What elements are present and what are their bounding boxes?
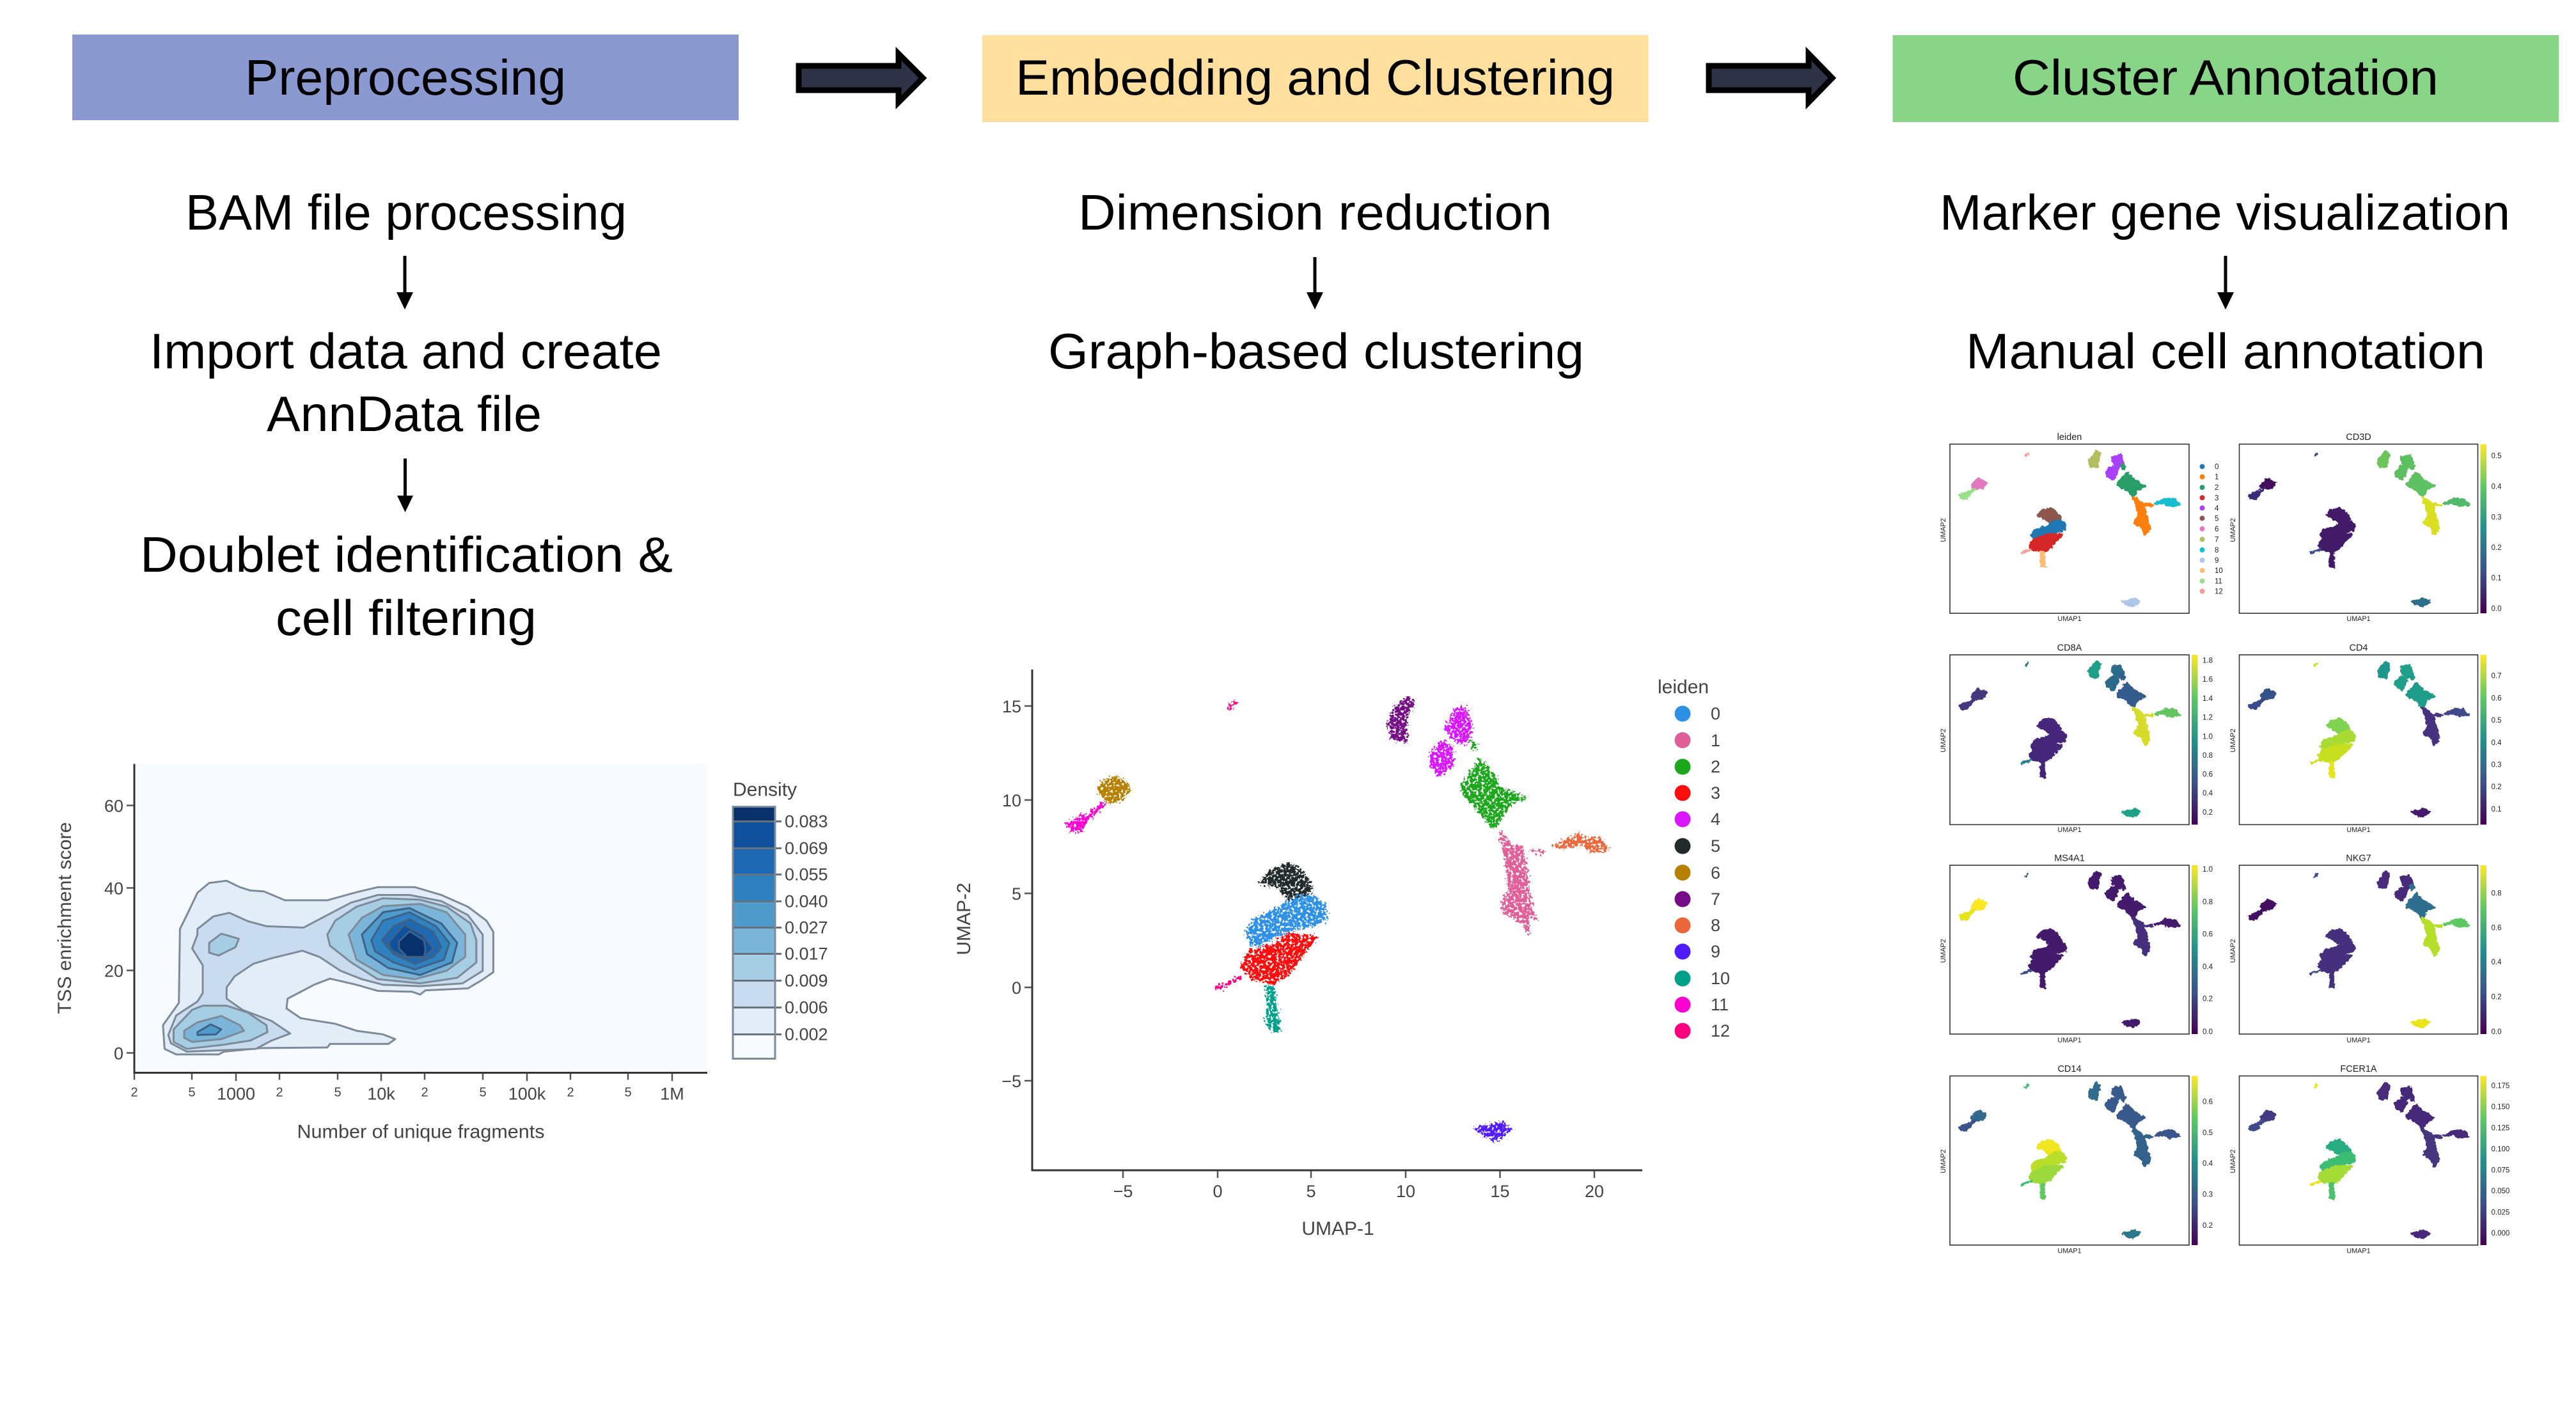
panel: NKG7 UMAP: 0.4 xyxy=(2492,959,2502,966)
x axis ticks and labels xyxy=(130,1073,684,1104)
text: Doublet identification and cell filtering: Doublet identification & xyxy=(140,526,673,583)
panel: FCER1A UMAP: 0.150 xyxy=(2492,1103,2509,1111)
x axis ticks and labels: −5 xyxy=(1113,1182,1133,1201)
panel: FCER1A UMAP: 0.100 xyxy=(2492,1145,2509,1153)
panel: CD3D UMAP: CD3D xyxy=(2346,432,2371,443)
column: preprocessing xyxy=(72,35,739,646)
text: Doublet identification and cell filtering xyxy=(140,526,673,646)
panel: leiden UMAP: 9 xyxy=(2215,557,2219,565)
panel: FCER1A UMAP: 0.075 xyxy=(2492,1166,2509,1174)
panel: CD8A UMAP: 1.2 xyxy=(2203,714,2213,721)
y axis ticks and labels: 20 xyxy=(104,962,123,981)
panel: CD4 UMAP: 0.5 xyxy=(2492,717,2502,725)
panel: leiden UMAP: 12 xyxy=(2215,588,2223,596)
x axis title: Number of unique fragments xyxy=(297,1122,545,1142)
panel: CD8A UMAP: CD8A xyxy=(2057,643,2082,654)
x axis ticks and labels: 20 xyxy=(1585,1182,1604,1201)
density legend: Density xyxy=(733,779,797,801)
panel: CD4 UMAP: 0.4 xyxy=(2492,739,2502,747)
panel: NKG7 UMAP: 0.2 xyxy=(2492,994,2502,1001)
x axis ticks and labels: 2 xyxy=(421,1086,428,1100)
x axis title: UMAP-1 xyxy=(1301,1218,1374,1239)
panel: CD4 UMAP: UMAP2 xyxy=(2229,728,2237,753)
leiden legend: 9 xyxy=(1711,942,1720,961)
panel: CD8A UMAP: 1.4 xyxy=(2203,695,2213,703)
panel: NKG7 UMAP: 0.6 xyxy=(2492,924,2502,932)
panel: leiden UMAP: 8 xyxy=(2215,547,2219,554)
panel: CD14 UMAP: 0.5 xyxy=(2203,1129,2213,1137)
panel: CD4 UMAP: 0.1 xyxy=(2492,806,2502,813)
leiden legend: 1 xyxy=(1711,731,1720,750)
leiden legend: 0 xyxy=(1711,704,1720,723)
leiden legend xyxy=(1658,677,1730,1040)
arrow: down to clustering xyxy=(1307,257,1323,310)
panel: NKG7 UMAP: UMAP2 xyxy=(2229,939,2237,963)
panel: MS4A1 UMAP: 0.4 xyxy=(2203,963,2213,971)
panel: CD14 UMAP: 0.2 xyxy=(2203,1222,2213,1230)
panel: MS4A1 UMAP: MS4A1 xyxy=(2054,853,2085,863)
panel: FCER1A UMAP: UMAP1 xyxy=(2346,1247,2371,1255)
y axis ticks and labels xyxy=(104,797,134,1063)
panel: NKG7 UMAP: UMAP1 xyxy=(2346,1037,2371,1044)
panel: CD14 UMAP: CD14 xyxy=(2057,1064,2082,1074)
panel: FCER1A UMAP xyxy=(2229,1064,2509,1255)
panel: FCER1A UMAP: 0.175 xyxy=(2492,1082,2509,1090)
density legend: 0.027 xyxy=(785,918,828,937)
x axis ticks and labels: 2 xyxy=(567,1086,574,1100)
y axis ticks and labels: 15 xyxy=(1002,697,1021,716)
density legend xyxy=(733,779,828,1059)
arrow: down to import xyxy=(397,256,413,310)
panel: NKG7 UMAP: 0.8 xyxy=(2492,890,2502,898)
text: Import data and create AnnData file: Import data and create xyxy=(150,323,662,379)
y axis title: TSS enrichment score xyxy=(54,822,75,1014)
x axis ticks and labels: 1M xyxy=(660,1085,684,1104)
panel: NKG7 UMAP: NKG7 xyxy=(2346,853,2371,863)
panel: CD8A UMAP: UMAP2 xyxy=(1940,728,1947,753)
chart: TSS enrichment density contour xyxy=(54,764,828,1142)
chart: main UMAP scatter coloured by leiden xyxy=(954,670,1730,1239)
panel: FCER1A UMAP: FCER1A xyxy=(2340,1064,2377,1074)
density legend: 0.009 xyxy=(785,971,828,990)
axes xyxy=(134,764,707,1073)
density legend: 0.040 xyxy=(785,891,828,911)
panel: CD3D UMAP xyxy=(2229,432,2502,623)
text: Marker gene visualization: Marker gene visualization xyxy=(1940,184,2510,240)
panel: CD3D UMAP: 0.4 xyxy=(2492,483,2502,491)
panel: CD8A UMAP: 0.8 xyxy=(2203,752,2213,760)
panel: leiden UMAP: 7 xyxy=(2215,536,2219,544)
heading: Cluster Annotation xyxy=(1893,35,2559,122)
panel: CD8A UMAP: 0.2 xyxy=(2203,809,2213,817)
x axis ticks and labels xyxy=(1113,1171,1604,1201)
panel: leiden UMAP: 10 xyxy=(2215,567,2223,575)
arrow: down to manual annotation xyxy=(2217,256,2234,310)
x axis ticks and labels: 10 xyxy=(1396,1182,1415,1201)
panel: CD4 UMAP: 0.3 xyxy=(2492,761,2502,769)
panel: CD4 UMAP xyxy=(2229,643,2502,834)
panel: CD4 UMAP: CD4 xyxy=(2349,643,2368,654)
panel: FCER1A UMAP: 0.050 xyxy=(2492,1188,2509,1195)
text: Manual cell annotation: Manual cell annotation xyxy=(1966,323,2485,379)
axes xyxy=(1032,670,1642,1170)
panel: CD4 UMAP: 0.6 xyxy=(2492,694,2502,702)
density legend: 0.002 xyxy=(785,1024,828,1044)
panel: MS4A1 UMAP: 0.8 xyxy=(2203,898,2213,906)
text: Graph-based clustering: Graph-based clustering xyxy=(1048,323,1584,379)
panel: FCER1A UMAP: 0.000 xyxy=(2492,1230,2509,1237)
density legend: 0.069 xyxy=(785,839,828,858)
panel: MS4A1 UMAP: 0.0 xyxy=(2203,1028,2213,1036)
panel: MS4A1 UMAP: UMAP1 xyxy=(2057,1037,2082,1044)
panel: FCER1A UMAP: 0.025 xyxy=(2492,1209,2509,1217)
density contours xyxy=(163,881,493,1055)
panel: leiden UMAP: 6 xyxy=(2215,526,2219,533)
leiden legend: 10 xyxy=(1711,969,1730,988)
scatter clusters xyxy=(1066,697,1608,1141)
panel: leiden UMAP: 3 xyxy=(2215,494,2219,502)
plot background xyxy=(134,764,707,1073)
arrow: preprocessing to embedding xyxy=(799,54,923,102)
panel: CD3D UMAP: 0.1 xyxy=(2492,574,2502,582)
y axis ticks and labels: 5 xyxy=(1012,884,1021,904)
leiden legend: 5 xyxy=(1711,836,1720,856)
panel: MS4A1 UMAP: 0.2 xyxy=(2203,996,2213,1003)
x axis ticks and labels: 5 xyxy=(188,1086,196,1100)
panel: CD8A UMAP: 1.0 xyxy=(2203,733,2213,741)
text: Import data and create AnnData file: AnnData file xyxy=(267,386,542,442)
y axis ticks and labels: 0 xyxy=(1012,978,1021,998)
text: BAM file processing: BAM file processing xyxy=(185,184,627,240)
panel: CD8A UMAP xyxy=(1940,643,2213,834)
text: Doublet identification and cell filtering: cell filtering xyxy=(276,590,537,646)
x axis ticks and labels: 1000 xyxy=(217,1085,255,1104)
panel: NKG7 UMAP xyxy=(2229,853,2502,1044)
panel: leiden UMAP xyxy=(1940,432,2223,623)
leiden legend: 12 xyxy=(1711,1021,1730,1040)
panel: CD4 UMAP: UMAP1 xyxy=(2346,826,2371,834)
panel: CD4 UMAP: 0.2 xyxy=(2492,783,2502,791)
heading: Embedding and Clustering xyxy=(982,35,1649,122)
column: embedding and clustering xyxy=(982,35,1649,379)
panel: leiden UMAP: 11 xyxy=(2215,578,2222,586)
panel: CD14 UMAP: 0.6 xyxy=(2203,1099,2213,1106)
panel: CD3D UMAP: 0.5 xyxy=(2492,453,2502,460)
panel: NKG7 UMAP: 0.0 xyxy=(2492,1028,2502,1036)
panel: CD14 UMAP: UMAP2 xyxy=(1940,1149,1947,1173)
leiden legend: 4 xyxy=(1711,810,1720,829)
panel: FCER1A UMAP: 0.125 xyxy=(2492,1124,2509,1132)
heading: Preprocessing xyxy=(72,35,739,120)
leiden legend: 3 xyxy=(1711,783,1720,803)
y axis ticks and labels: 10 xyxy=(1002,791,1021,810)
text: Dimension reduction: Dimension reduction xyxy=(1078,184,1552,240)
x axis ticks and labels: 100k xyxy=(508,1085,546,1104)
panel: CD3D UMAP: 0.0 xyxy=(2492,606,2502,613)
panel: MS4A1 UMAP: UMAP2 xyxy=(1940,939,1947,963)
x axis ticks and labels: 0 xyxy=(1213,1182,1223,1201)
panel: CD3D UMAP: UMAP2 xyxy=(2229,518,2237,542)
arrow: down to doublet xyxy=(397,459,413,512)
panel: MS4A1 UMAP: 0.6 xyxy=(2203,931,2213,939)
panel: leiden UMAP: 0 xyxy=(2215,464,2219,471)
panel: FCER1A UMAP: UMAP2 xyxy=(2229,1149,2237,1173)
text: Import data and create AnnData file xyxy=(150,323,662,442)
y axis ticks and labels: 60 xyxy=(104,797,123,816)
y axis ticks and labels: 0 xyxy=(114,1044,123,1063)
x axis ticks and labels: 5 xyxy=(334,1086,342,1100)
panel: leiden UMAP: leiden xyxy=(2057,432,2082,443)
panel: MS4A1 UMAP: 1.0 xyxy=(2203,866,2213,874)
panel: CD8A UMAP: 1.6 xyxy=(2203,676,2213,684)
density legend: 0.055 xyxy=(785,865,828,884)
panel: CD3D UMAP: UMAP1 xyxy=(2346,615,2371,623)
panel: leiden UMAP: 4 xyxy=(2215,505,2219,512)
panel: CD14 UMAP xyxy=(1940,1064,2213,1255)
panel: MS4A1 UMAP xyxy=(1940,853,2213,1044)
panel: CD3D UMAP: 0.2 xyxy=(2492,544,2502,552)
x axis ticks and labels: 2 xyxy=(130,1086,138,1100)
x axis ticks and labels: 5 xyxy=(624,1086,632,1100)
leiden legend: 6 xyxy=(1711,863,1720,882)
y axis ticks and labels xyxy=(1001,697,1032,1091)
panel: CD14 UMAP: UMAP1 xyxy=(2057,1247,2082,1255)
panel: CD8A UMAP: 0.6 xyxy=(2203,771,2213,778)
y axis title: UMAP-2 xyxy=(954,882,975,955)
column: cluster annotation xyxy=(1893,35,2559,379)
leiden legend: leiden xyxy=(1658,677,1709,698)
panel: leiden UMAP: UMAP2 xyxy=(1940,518,1947,542)
heading: Embedding and Clustering: Embedding and Clustering xyxy=(1016,49,1615,106)
panel: CD14 UMAP: 0.4 xyxy=(2203,1160,2213,1168)
heading: Cluster Annotation: Cluster Annotation xyxy=(2013,49,2439,106)
panel: CD8A UMAP: 0.4 xyxy=(2203,790,2213,797)
leiden legend: 2 xyxy=(1711,757,1720,776)
x axis ticks and labels: 5 xyxy=(479,1086,487,1100)
y axis ticks and labels: 40 xyxy=(104,879,123,898)
panel: leiden UMAP: 2 xyxy=(2215,484,2219,492)
panel: leiden UMAP: 1 xyxy=(2215,474,2219,482)
x axis ticks and labels: 5 xyxy=(1306,1182,1316,1201)
density legend: 0.006 xyxy=(785,998,828,1017)
y axis ticks and labels: −5 xyxy=(1001,1072,1021,1091)
density legend: 0.083 xyxy=(785,812,828,831)
x axis ticks and labels: 15 xyxy=(1490,1182,1510,1201)
panel: leiden UMAP: 5 xyxy=(2215,515,2219,522)
leiden legend: 7 xyxy=(1711,890,1720,909)
heading: Preprocessing: Preprocessing xyxy=(245,49,566,106)
x axis ticks and labels: 2 xyxy=(276,1086,283,1100)
x axis ticks and labels: 10k xyxy=(367,1085,395,1104)
leiden legend: 8 xyxy=(1711,916,1720,935)
panel: CD8A UMAP: UMAP1 xyxy=(2057,826,2082,834)
panel: CD4 UMAP: 0.7 xyxy=(2492,673,2502,680)
leiden legend: 11 xyxy=(1711,995,1729,1014)
arrow: embedding to annotation xyxy=(1709,54,1832,102)
density legend: 0.017 xyxy=(785,944,828,963)
panel: leiden UMAP: UMAP1 xyxy=(2057,615,2082,623)
panel: CD8A UMAP: 1.8 xyxy=(2203,657,2213,665)
panel: CD3D UMAP: 0.3 xyxy=(2492,514,2502,521)
panel: CD14 UMAP: 0.3 xyxy=(2203,1191,2213,1198)
